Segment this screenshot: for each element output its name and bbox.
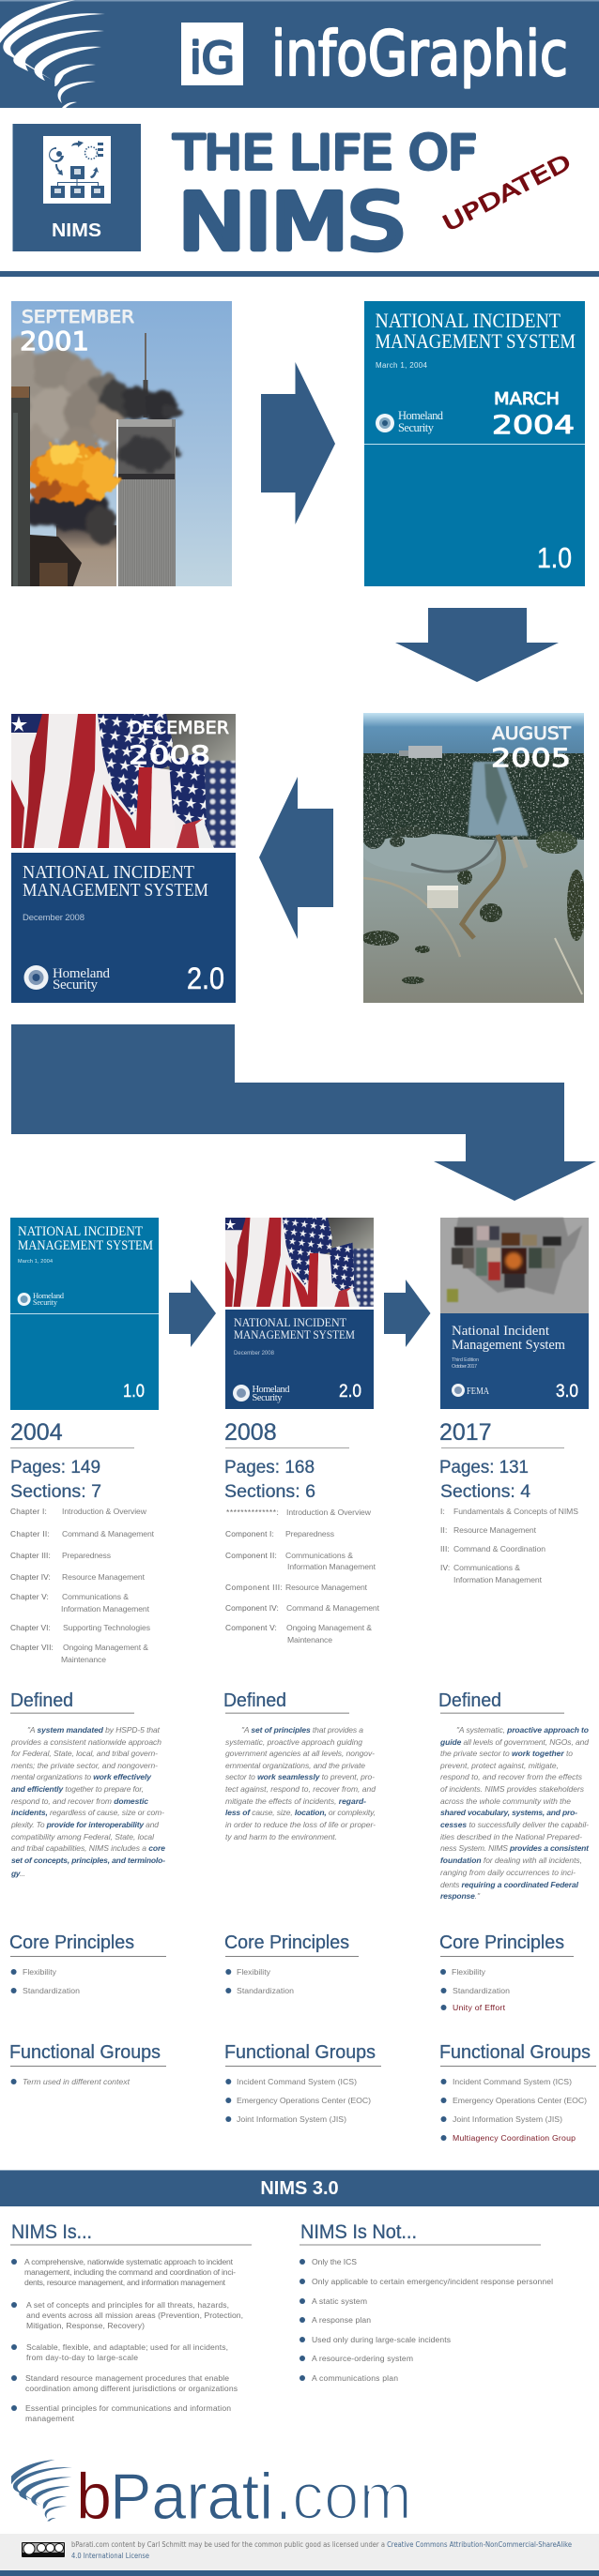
component list: Component I: bbox=[225, 1529, 274, 1538]
small cover: 2017: 3.0 bbox=[556, 1382, 578, 1402]
defined: 2017 bbox=[438, 1690, 590, 1901]
core principles: 2004: Core Principles bbox=[9, 1932, 134, 1953]
defined: 2008: government agencies at all levels, nongov- bbox=[225, 1749, 375, 1758]
functional groups: 2008: Incident Command System (ICS) bbox=[237, 2077, 357, 2086]
column 2004 stats: Pages: 149 bbox=[10, 1457, 100, 1477]
component list: Communications & bbox=[285, 1551, 353, 1560]
defined: 2017: of incidents. NIMS provides stakeholders bbox=[440, 1784, 585, 1794]
section list: II: bbox=[440, 1525, 447, 1535]
column 2017 stats: Pages: 131 bbox=[439, 1457, 529, 1477]
panel: NIMS is: A set of concepts and principles for all threats, hazards, bbox=[26, 2300, 229, 2310]
cover: NIMS 2.0 December 2008: December 2008 bbox=[23, 913, 84, 923]
column 2017 stats bbox=[439, 1419, 578, 1584]
icon: seal bbox=[24, 965, 49, 990]
defined: 2004: "A system mandated by HSPD-5 that bbox=[27, 1725, 161, 1735]
small cover: 2008: MANAGEMENT SYSTEM bbox=[234, 1327, 355, 1341]
small cover: 2017: FEMA bbox=[467, 1386, 490, 1397]
section list: I: bbox=[440, 1507, 445, 1516]
icon: Creative Commons badge bbox=[22, 2542, 65, 2557]
small cover: 2017 bbox=[440, 1218, 589, 1409]
NIMS 3.0 banner bbox=[0, 2170, 599, 2206]
arrow: 1.0 to 2.0 bbox=[169, 1280, 216, 1347]
core principles: 2017 bbox=[439, 1932, 574, 2012]
functional groups: 2004 bbox=[9, 2041, 166, 2086]
defined: 2017: across the whole community with the bbox=[440, 1796, 571, 1806]
core principles: 2017: Flexibility bbox=[452, 1967, 486, 1977]
tower bbox=[116, 419, 176, 586]
chapter list: Command & Management bbox=[62, 1529, 155, 1538]
small cover: 2008: 2.0 bbox=[339, 1382, 361, 1402]
core principles: 2008: Standardization bbox=[237, 1986, 294, 1995]
arrow: 2001 to 2004 bbox=[261, 362, 335, 524]
chapter list: Resource Management bbox=[62, 1572, 146, 1582]
column 2008 stats: 2008 bbox=[224, 1419, 277, 1446]
chapter list: Ongoing Management & bbox=[63, 1643, 148, 1652]
defined: 2008: tect against, respond to, recover from, and bbox=[225, 1784, 376, 1794]
cover: NIMS 2.0 December 2008 bbox=[11, 714, 236, 1003]
core principles: 2017: Unity of Effort bbox=[453, 2003, 506, 2012]
component list: Maintenance bbox=[287, 1635, 332, 1644]
small cover: 2017: National Incident bbox=[452, 1324, 549, 1339]
core principles: 2004: Flexibility bbox=[23, 1967, 57, 1977]
functional groups: 2008 bbox=[224, 2041, 381, 2124]
icon: tornado bbox=[0, 0, 105, 108]
cover: NIMS 1.0 March 2004: Homeland bbox=[398, 409, 444, 422]
chapter list: Chapter I: bbox=[10, 1507, 47, 1516]
defined: 2004: for Federal, State, local, and tribal govern- bbox=[11, 1749, 158, 1758]
defined: 2008: "A set of principles that provides a bbox=[241, 1725, 363, 1735]
small cover: 2004 bbox=[10, 1218, 159, 1410]
wordmark: b bbox=[76, 2460, 112, 2533]
functional groups: 2017: Functional Groups bbox=[439, 2041, 591, 2063]
cover: NIMS 1.0 March 2004 bbox=[364, 301, 585, 586]
panel: NIMS is bbox=[10, 2221, 252, 2423]
NIMS 3.0 banner: NIMS 3.0 bbox=[260, 2178, 339, 2199]
core principles: 2008: Flexibility bbox=[237, 1967, 271, 1977]
chapter list bbox=[10, 1507, 155, 1664]
column 2004 stats: Sections: 7 bbox=[10, 1481, 101, 1502]
section list: III: bbox=[440, 1544, 450, 1553]
panel: NIMS is not: A resource-ordering system bbox=[312, 2354, 413, 2363]
component list: Ongoing Management & bbox=[286, 1623, 372, 1632]
iG logo box: iG bbox=[190, 33, 235, 83]
bParati logo bbox=[11, 2460, 412, 2533]
cover: NIMS 2.0 December 2008: 2008 bbox=[129, 741, 210, 770]
functional groups: 2017: Joint Information System (JIS) bbox=[453, 2114, 562, 2124]
panel: NIMS is: and events across all mission areas (Prevention, Protection, bbox=[26, 2311, 243, 2320]
panel: NIMS is: from day-to-day to large-scale bbox=[26, 2353, 138, 2362]
panel: NIMS is: Scalable, flexible, and adaptable; used for all incidents, bbox=[26, 2342, 228, 2352]
panel: NIMS is: dents, resource management, and information management bbox=[24, 2278, 226, 2287]
chapter list: Maintenance bbox=[61, 1655, 106, 1664]
small cover: 2004: March 1, 2004 bbox=[18, 1259, 53, 1265]
defined: 2008: systematic, proactive approach guiding bbox=[225, 1737, 362, 1747]
functional groups: 2017: Multiagency Coordination Group bbox=[453, 2133, 576, 2143]
photo: September 2001 towers: 2001 bbox=[20, 326, 89, 356]
cover: NIMS 1.0 March 2004: March 1, 2004 bbox=[376, 361, 428, 370]
icon: seal bbox=[452, 1384, 465, 1397]
column 2004 stats: 2004 bbox=[10, 1419, 63, 1446]
footer licence strip: 4.0 International License bbox=[71, 2552, 149, 2560]
defined: 2004: provides a consistent nationwide approach bbox=[10, 1737, 161, 1747]
small cover: 2004: Homeland bbox=[33, 1291, 65, 1300]
chapter list: Chapter III: bbox=[10, 1551, 51, 1560]
defined: 2004: ments; the private sector, and nongovern- bbox=[11, 1761, 158, 1770]
chapter list: Chapter V: bbox=[10, 1592, 49, 1601]
defined: 2008: Defined bbox=[223, 1690, 286, 1711]
defined: 2017: "A systematic, proactive approach to bbox=[456, 1725, 589, 1735]
section list: Communications & bbox=[453, 1563, 520, 1572]
icon: NIMS org chart bbox=[49, 141, 104, 198]
small cover: 2017: October 2017 bbox=[452, 1364, 477, 1370]
functional groups: 2008: Functional Groups bbox=[224, 2041, 376, 2063]
component list: Resource Management bbox=[285, 1583, 368, 1592]
icon: seal bbox=[376, 414, 394, 432]
chapter list: Chapter IV: bbox=[10, 1572, 51, 1582]
defined: 2017: respond to, and recover from the effects bbox=[440, 1772, 583, 1781]
component list: Component II: bbox=[225, 1551, 277, 1560]
cover: NIMS 1.0 March 2004: Security bbox=[398, 421, 435, 434]
component list: Preparedness bbox=[285, 1529, 334, 1538]
defined: 2008: ernmental organizations, and the private bbox=[225, 1761, 365, 1770]
column 2017 stats: Sections: 4 bbox=[440, 1481, 530, 1502]
defined: 2004: and tribal capabilities, NIMS includes a core bbox=[11, 1843, 165, 1853]
defined: 2017: guide all levels of government, NGOs, and bbox=[439, 1737, 589, 1747]
defined: 2017: ranging from daily occurrences to inci- bbox=[440, 1868, 576, 1877]
chapter list: Chapter VII: bbox=[10, 1643, 54, 1652]
section list: IV: bbox=[440, 1563, 450, 1572]
panel: NIMS is not bbox=[300, 2221, 553, 2383]
title: the life of NIMS: THE LIFE OF bbox=[173, 126, 477, 180]
chapter list: Preparedness bbox=[62, 1551, 111, 1560]
small cover: 2008: Security bbox=[252, 1393, 283, 1403]
defined: 2008: mitigate the effects of incidents, regard- bbox=[225, 1796, 366, 1806]
component list: Component III: bbox=[225, 1583, 283, 1592]
small cover: 2008 bbox=[225, 1218, 374, 1409]
panel: NIMS is: Essential principles for communications and information bbox=[25, 2403, 231, 2413]
small cover: 2004: 1.0 bbox=[123, 1382, 145, 1402]
panel: NIMS is not: Only the ICS bbox=[312, 2257, 357, 2266]
defined: 2004: mental organizations to work effectively bbox=[11, 1772, 152, 1781]
chapter list: Chapter VI: bbox=[10, 1623, 51, 1632]
icon: small tornado bbox=[11, 2460, 72, 2522]
defined: 2017: the private sector to work together to bbox=[440, 1749, 573, 1758]
core principles: 2004 bbox=[9, 1932, 166, 1995]
arrow: 2004 to 2005 bbox=[395, 608, 559, 682]
defined: 2017: ness System. NIMS provides a consistent bbox=[440, 1843, 590, 1853]
panel: NIMS is not: Only applicable to certain emergency/incident response personnel bbox=[312, 2277, 553, 2286]
small cover: 2008: Homeland bbox=[252, 1385, 290, 1395]
defined: 2017: foundation for dealing with all incidents, bbox=[440, 1856, 582, 1865]
chapter list: Chapter II: bbox=[10, 1529, 50, 1538]
component list: Command & Management bbox=[286, 1603, 380, 1613]
small cover: 2004: NATIONAL INCIDENT bbox=[18, 1224, 143, 1239]
functional groups: 2004: Term used in different context bbox=[23, 2077, 131, 2086]
chapter list: Introduction & Overview bbox=[62, 1507, 147, 1516]
defined: 2017: Defined bbox=[438, 1690, 501, 1711]
cover: NIMS 2.0 December 2008: 2.0 bbox=[187, 962, 224, 995]
defined: 2004 bbox=[10, 1690, 165, 1878]
wordmark bbox=[76, 2460, 412, 2533]
defined: 2004: compatibility among Federal, State, local bbox=[11, 1832, 155, 1841]
section list: Fundamentals & Concepts of NIMS bbox=[453, 1507, 578, 1516]
icon: seal bbox=[233, 1385, 250, 1402]
defined: 2017: shared vocabulary, systems, and pro- bbox=[440, 1808, 577, 1817]
defined: 2004: Defined bbox=[10, 1690, 73, 1711]
functional groups: 2017: Emergency Operations Center (EOC) bbox=[453, 2096, 587, 2105]
small cover: 2004: MANAGEMENT SYSTEM bbox=[18, 1238, 153, 1253]
iG logo box bbox=[181, 23, 243, 85]
header banner bbox=[0, 0, 599, 108]
panel: NIMS is: coordination among different jurisdictions or organizations bbox=[25, 2384, 238, 2393]
functional groups: 2008: Joint Information System (JIS) bbox=[237, 2114, 346, 2124]
cover: NIMS 1.0 March 2004: NATIONAL INCIDENT bbox=[376, 309, 561, 332]
component list: **************: bbox=[226, 1508, 279, 1517]
arrow: 2.0 to 3.0 bbox=[384, 1280, 430, 1347]
arrow: 2005 to 2008 bbox=[259, 777, 333, 939]
map of US photo mosaic bbox=[447, 1218, 582, 1302]
arrow: long transition to 2017 bbox=[11, 1024, 596, 1201]
defined: 2017: prevent, protect against, mitigate, bbox=[439, 1761, 559, 1770]
component list bbox=[225, 1508, 380, 1644]
core principles: 2008 bbox=[224, 1932, 359, 1995]
wordmark: com bbox=[292, 2460, 412, 2533]
panel: NIMS is: A comprehensive, nationwide systematic approach to incident bbox=[24, 2257, 234, 2266]
core principles: 2017: Core Principles bbox=[439, 1932, 564, 1953]
panel: NIMS is: management, including the command and coordination of inci- bbox=[24, 2267, 236, 2277]
cover: NIMS 2.0 December 2008: MANAGEMENT SYSTEM bbox=[23, 880, 208, 901]
photo: August 2005 flood: 2005 bbox=[491, 744, 571, 773]
column 2008 stats: Sections: 6 bbox=[224, 1481, 315, 1502]
NIMS logo panel bbox=[13, 124, 141, 251]
functional groups: 2004: Functional Groups bbox=[9, 2041, 161, 2063]
panel: NIMS is: management bbox=[25, 2414, 75, 2423]
panel: NIMS is: Standard resource management procedures that enable bbox=[25, 2373, 229, 2383]
cover: NIMS 2.0 December 2008: Security bbox=[53, 977, 98, 993]
photo: August 2005 flood bbox=[361, 713, 586, 1003]
footer licence strip bbox=[0, 2534, 599, 2570]
defined: 2008: sector to work seamlessly to prevent, pro- bbox=[225, 1772, 375, 1781]
small cover: 2008: December 2008 bbox=[234, 1351, 275, 1356]
small cover: 2008: NATIONAL INCIDENT bbox=[234, 1315, 346, 1329]
cover: NIMS 1.0 March 2004: 2004 bbox=[492, 411, 575, 440]
component list: Component IV: bbox=[225, 1603, 279, 1613]
defined: 2008 bbox=[223, 1690, 376, 1841]
core principles: 2017: Standardization bbox=[453, 1986, 510, 1995]
licence text: bParati.com content by Carl Schmitt may be used for the common public good as licensed under a Creative Commons Attribution-NonCommercial-ShareAlike bbox=[71, 2540, 572, 2549]
title: the life of NIMS: NIMS bbox=[178, 178, 405, 267]
chapter list: Information Management bbox=[61, 1604, 150, 1614]
section list: Information Management bbox=[453, 1575, 543, 1584]
updated stamp: UPDATED bbox=[439, 150, 576, 236]
small cover: 2017: Third Edition bbox=[452, 1357, 479, 1363]
column 2004 stats bbox=[10, 1419, 155, 1664]
component list: Introduction & Overview bbox=[286, 1508, 372, 1517]
icon: seal bbox=[18, 1293, 31, 1306]
defined: 2017: ities described in the National Prepared- bbox=[440, 1832, 582, 1841]
photo: September 2001 towers bbox=[0, 301, 232, 586]
defined: 2004: respond to, and recover from domestic bbox=[11, 1796, 148, 1806]
section list bbox=[440, 1507, 578, 1584]
wordmark: Parati bbox=[110, 2460, 273, 2533]
panel: NIMS is: NIMS Is... bbox=[11, 2221, 92, 2243]
core principles: 2004: Standardization bbox=[23, 1986, 80, 1995]
defined: 2004: gy... bbox=[10, 1869, 25, 1878]
cover: NIMS 1.0 March 2004: MARCH bbox=[494, 389, 560, 409]
logo caption: NIMS bbox=[52, 220, 101, 241]
panel: NIMS is: Mitigation, Response, Recovery) bbox=[26, 2321, 145, 2330]
defined: 2004: incidents, regardless of cause, size or com- bbox=[11, 1808, 164, 1817]
defined: 2004: plexity. To provide for interoperability and bbox=[10, 1820, 159, 1829]
panel: NIMS is not: NIMS Is Not... bbox=[300, 2221, 417, 2243]
panel: NIMS is not: Used only during large-scale incidents bbox=[312, 2335, 451, 2344]
defined: 2017: response." bbox=[440, 1891, 481, 1901]
defined: 2004: set of concepts, principles, and terminolo- bbox=[11, 1856, 165, 1865]
panel: NIMS is not: A communications plan bbox=[312, 2373, 398, 2383]
functional groups: 2017 bbox=[439, 2041, 596, 2143]
functional groups: 2008: Emergency Operations Center (EOC) bbox=[237, 2096, 371, 2105]
component list: Component V: bbox=[225, 1623, 277, 1632]
wordmark: . bbox=[278, 2460, 289, 2533]
panel: NIMS is not: A static system bbox=[312, 2296, 367, 2306]
small cover: 2004: Security bbox=[33, 1298, 57, 1307]
defined: 2008: in order to reduce the loss of life or proper- bbox=[225, 1820, 376, 1829]
defined: 2004: and efficiently together to prepare for, bbox=[11, 1784, 144, 1794]
section list: Command & Coordination bbox=[453, 1544, 545, 1553]
small cover: 2017: Management System bbox=[452, 1338, 566, 1353]
functional groups: 2017: Incident Command System (ICS) bbox=[453, 2077, 572, 2086]
defined: 2017: dents requiring a coordinated Federal bbox=[440, 1880, 579, 1889]
defined: 2017: cesses to successfully deliver the capabil- bbox=[440, 1820, 589, 1829]
column 2008 stats bbox=[224, 1419, 380, 1644]
defined: 2008: less of cause, size, location, or complexity, bbox=[225, 1808, 376, 1817]
section list: Resource Management bbox=[453, 1525, 537, 1535]
component list: Information Management bbox=[287, 1562, 376, 1571]
column 2008 stats: Pages: 168 bbox=[224, 1457, 315, 1477]
date label: SEPTEMBER bbox=[22, 308, 134, 327]
chapter list: Supporting Technologies bbox=[63, 1623, 150, 1632]
chapter list: Communications & bbox=[62, 1592, 129, 1601]
cover: NIMS 1.0 March 2004: 1.0 bbox=[537, 541, 572, 574]
cover: NIMS 2.0 December 2008: Homeland bbox=[53, 966, 111, 981]
panel: NIMS is not: A response plan bbox=[312, 2315, 371, 2325]
date label: AUGUST bbox=[492, 724, 572, 744]
column 2017 stats: 2017 bbox=[439, 1419, 492, 1446]
defined: 2008: ty and harm to the environment. bbox=[225, 1832, 337, 1841]
title: the life of NIMS bbox=[173, 126, 576, 267]
core principles: 2008: Core Principles bbox=[224, 1932, 349, 1953]
date label: DECEMBER bbox=[129, 719, 229, 738]
cover: NIMS 2.0 December 2008: NATIONAL INCIDENT bbox=[23, 862, 194, 883]
